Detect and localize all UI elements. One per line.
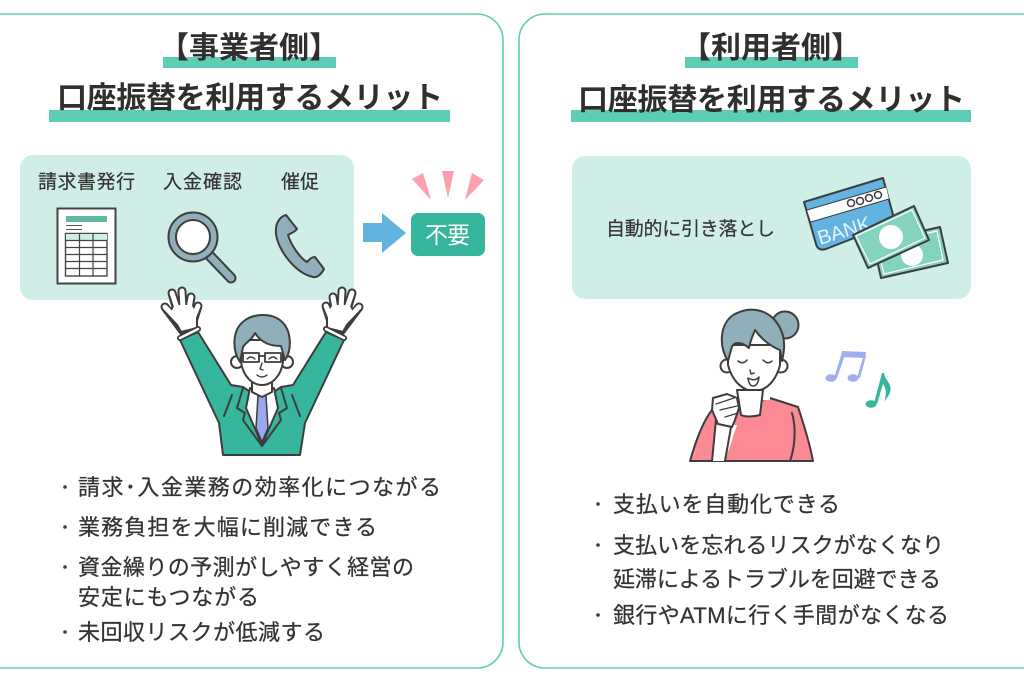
mug xyxy=(737,390,763,416)
hair xyxy=(722,310,784,361)
sweater xyxy=(690,398,813,461)
label: invoicing: 請求書発行 xyxy=(38,171,135,193)
heading: business side xyxy=(49,32,450,122)
list: user benefits: 延滞によるトラブルを回避できる xyxy=(613,567,941,592)
icon: magnifying glass xyxy=(168,212,231,278)
list: business benefits: 請求･入金業務の効率化につながる xyxy=(78,475,441,500)
list: user benefits: 銀行やATMに行く手間がなくなる xyxy=(613,603,949,628)
list: user benefits: 支払いを忘れるリスクがなくなり xyxy=(613,533,944,558)
label: payment check: 入金確認 xyxy=(163,171,242,193)
hand xyxy=(712,394,739,427)
illustration: businessman xyxy=(165,291,359,455)
icon: bank card and banknotes: BANK xyxy=(815,213,874,250)
list: business benefits: 資金繰りの予測がしやすく経営の xyxy=(78,555,414,580)
right hand xyxy=(326,291,359,332)
glasses xyxy=(243,353,281,362)
hair xyxy=(234,315,290,362)
bun xyxy=(772,312,798,338)
icon: telephone xyxy=(276,215,324,277)
left hand xyxy=(165,291,198,332)
list: user benefits: 支払いを自動化できる xyxy=(613,492,840,517)
panel: unnecessary tasks xyxy=(20,155,354,300)
neck xyxy=(742,385,770,400)
heading: user side: 口座振替を利用するメリット xyxy=(578,84,965,117)
panel: automatic debit xyxy=(572,156,971,299)
heading: business side: 口座振替を利用するメリット xyxy=(57,82,443,115)
list: business benefits xyxy=(63,475,441,645)
icon: blue music note xyxy=(826,351,866,382)
list: business benefits: 未回収リスクが低減する xyxy=(78,620,325,645)
icon: invoice xyxy=(58,208,116,284)
illustration: woman with cup xyxy=(690,310,813,461)
ears and face xyxy=(720,360,734,372)
eyes and mouth xyxy=(738,360,772,374)
suit xyxy=(180,332,344,455)
heading: user side xyxy=(571,32,971,122)
icon: emphasis marks xyxy=(412,171,484,200)
ears xyxy=(231,356,243,368)
neck and face xyxy=(252,380,272,397)
label: reminder: 催促 xyxy=(281,171,319,193)
heading: business side: 【事業者側】 xyxy=(159,32,339,65)
arrow xyxy=(363,213,406,253)
icon: bank card and banknotes xyxy=(804,178,948,278)
badge: not required: 不要 xyxy=(425,222,470,248)
list: business benefits: 業務負担を大幅に削減できる xyxy=(78,515,377,540)
forearm xyxy=(712,425,737,461)
list: user benefits xyxy=(596,492,949,628)
panel: business side xyxy=(0,14,503,668)
panel: user side xyxy=(519,14,1024,668)
badge: not required xyxy=(411,213,485,256)
mouth xyxy=(257,363,267,377)
shirt and tie xyxy=(246,388,278,445)
heading: user side: 【利用者側】 xyxy=(681,32,861,65)
label: automatic debit: 自動的に引き落とし xyxy=(606,218,775,240)
icon: green music note xyxy=(866,373,891,408)
list: business benefits: 安定にもつながる xyxy=(78,585,259,610)
